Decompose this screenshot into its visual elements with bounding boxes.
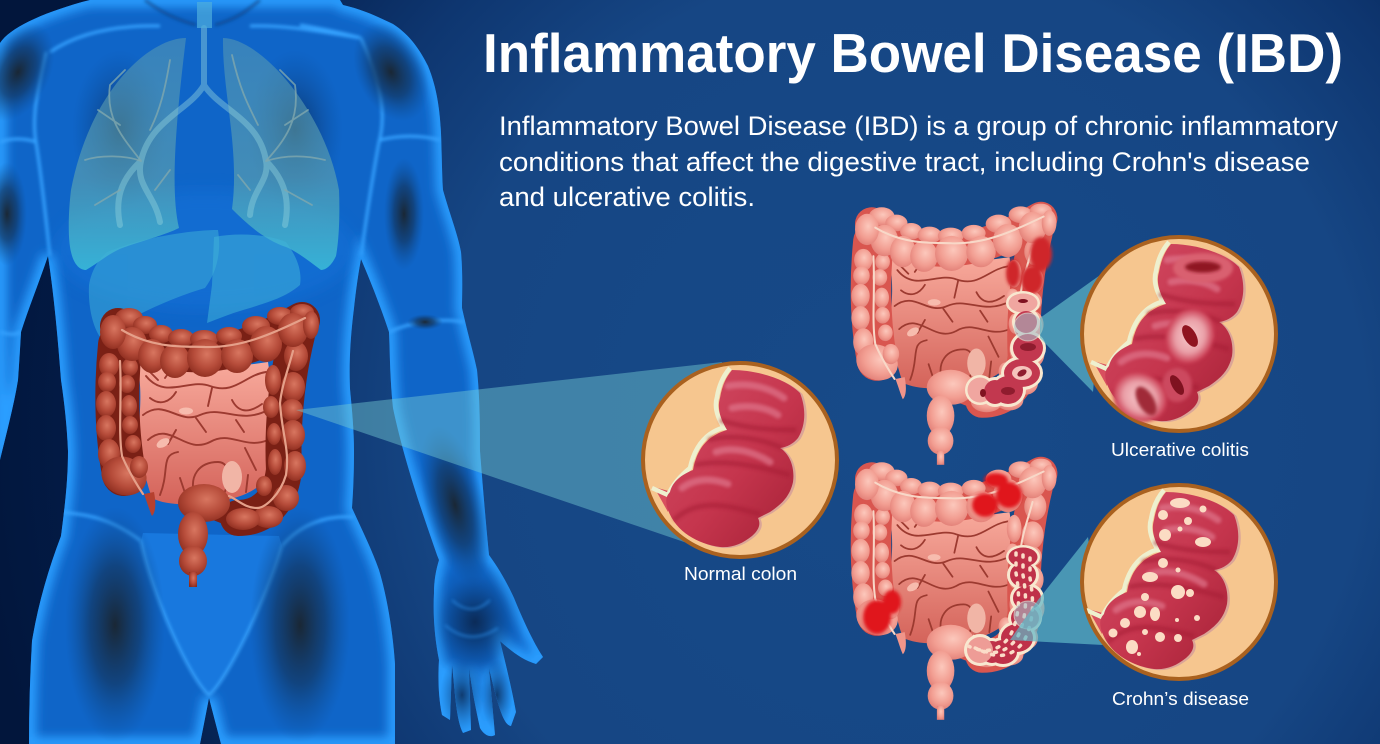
description <box>499 111 1339 212</box>
circle background <box>1082 237 1276 431</box>
spotted segments <box>1086 490 1241 670</box>
inflamed patches <box>863 473 1022 634</box>
label: crohn's disease: Crohn’s disease <box>1112 689 1249 709</box>
magnifier spot <box>1014 601 1042 629</box>
healthy colon base <box>851 459 1056 720</box>
cut-away diseased section <box>964 545 1044 667</box>
inflamed upper descending segment <box>1006 237 1052 294</box>
main colon <box>96 304 319 587</box>
body silhouette <box>0 0 543 744</box>
description: and ulcerative colitis. <box>499 182 755 212</box>
label: normal colon: Normal colon <box>684 564 797 584</box>
description: conditions that affect the digestive tract, including Crohn's disease <box>499 147 1310 177</box>
neck lines <box>145 0 260 25</box>
healthy colon base <box>851 204 1056 465</box>
liver and stomach <box>89 230 300 337</box>
normal colon callout <box>643 363 837 557</box>
title: Inflammatory Bowel Disease (IBD) <box>483 22 1343 84</box>
beam to crohn's disease <box>1010 537 1103 645</box>
ulcerative colitis callout <box>1082 237 1276 432</box>
glowing body shading <box>0 0 543 744</box>
ulcerated segments <box>1091 242 1246 432</box>
ulcerative colitis colon <box>851 204 1056 465</box>
lungs <box>69 2 339 270</box>
crohn's disease colon <box>851 459 1056 720</box>
label: ulcerative colitis: Ulcerative colitis <box>1111 440 1249 460</box>
cut-away diseased section <box>965 291 1046 407</box>
crohn's disease callout <box>1082 485 1276 679</box>
beam to normal colon <box>296 362 722 544</box>
magnifier spot <box>1014 313 1042 341</box>
human body figure <box>0 0 543 744</box>
normal colon segments <box>652 368 807 548</box>
description: Inflammatory Bowel Disease (IBD) is a group of chronic inflammatory <box>499 111 1339 141</box>
circle background <box>1082 485 1276 679</box>
beam to ulcerative colitis <box>1040 273 1103 392</box>
circle background <box>643 363 837 557</box>
